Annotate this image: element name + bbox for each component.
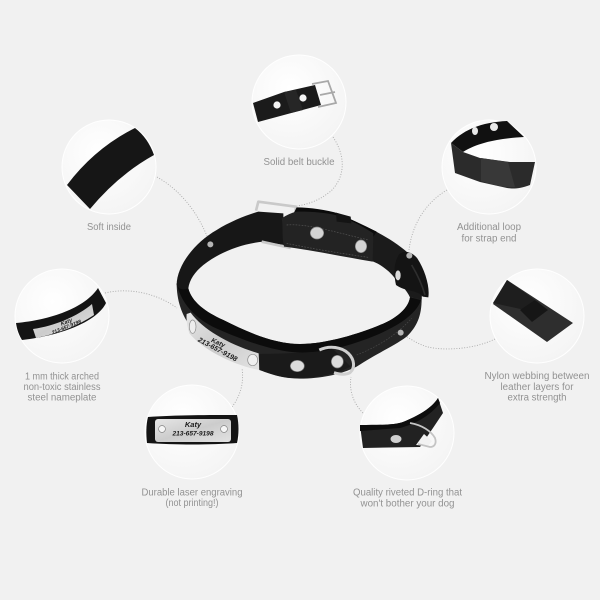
stitching — [357, 318, 412, 355]
top rim beside buckle — [293, 207, 377, 237]
caption: Soft inside — [87, 222, 131, 233]
leather lining swatch — [67, 128, 154, 209]
strap — [146, 415, 238, 444]
plate rivets — [159, 426, 227, 432]
nameplate — [186, 313, 259, 370]
D-ring leather tab — [259, 349, 351, 378]
D-ring — [410, 423, 436, 447]
engraved phone: 213-657-9198 — [196, 336, 238, 363]
buckle frame — [256, 202, 296, 248]
front strap inner rim — [177, 283, 421, 353]
top flap — [493, 280, 535, 310]
plate name: Katy — [60, 317, 74, 328]
D-ring rivets — [290, 355, 343, 372]
detail circle — [62, 120, 156, 214]
plate phone: 213-657-9198 — [50, 319, 82, 337]
strap stitches — [287, 225, 368, 257]
strap rivets — [310, 227, 367, 253]
engraved name: Katy — [185, 420, 202, 429]
connector: nameplate — [105, 291, 177, 308]
detail circle — [252, 55, 346, 149]
panel: additional loop — [442, 120, 536, 244]
connector: strap loop — [409, 190, 447, 250]
keeper loop — [481, 158, 515, 187]
caption line 2: won't bother your dog — [360, 498, 454, 510]
steel plate — [155, 419, 231, 442]
strap loop at end — [394, 252, 429, 297]
connector: laser engraving — [232, 368, 243, 407]
panel: nameplate — [15, 269, 109, 404]
strap — [253, 85, 321, 122]
outer strap — [451, 143, 535, 189]
connector: belt buckle — [297, 137, 342, 206]
strap — [16, 288, 106, 340]
marker dots — [207, 241, 412, 336]
loop rivet — [395, 270, 401, 280]
engraved phone: 213-657-9198 — [171, 430, 214, 438]
steel plate — [33, 304, 94, 338]
caption: Nylon webbing between — [484, 371, 590, 382]
inner strap — [451, 121, 524, 152]
strap holes — [472, 123, 498, 135]
detail circle — [360, 386, 454, 480]
caption line 2: non-toxic stainless — [24, 382, 100, 393]
caption line 3: extra strength — [508, 392, 566, 404]
panel: laser engraving — [142, 385, 242, 509]
loop highlight — [412, 265, 425, 295]
detail circle — [490, 269, 584, 363]
rivet — [390, 435, 402, 443]
caption: Durable laser engraving — [142, 488, 242, 498]
panel: solid belt buckle — [252, 55, 346, 168]
caption: 1 mm thick arched — [25, 372, 99, 382]
connector: soft inside — [157, 177, 209, 241]
right side strap — [337, 213, 422, 299]
strap edge — [360, 398, 440, 431]
connector: nylon webbing — [404, 335, 495, 349]
strap — [360, 398, 443, 448]
D-ring — [319, 347, 354, 374]
caption: Additional loop — [457, 222, 521, 233]
connector: D-ring — [350, 377, 363, 413]
keeper — [284, 90, 303, 113]
leather layer — [493, 280, 573, 342]
ring opening — [416, 434, 432, 446]
back strap with soft lining — [177, 212, 284, 289]
holes — [273, 94, 307, 109]
front strap — [177, 283, 422, 379]
caption line 2: leather layers for — [500, 382, 574, 393]
caption line 2: (not printing!) — [166, 498, 218, 509]
detail circle — [442, 120, 536, 214]
panel: nylon webbing — [484, 269, 590, 404]
buckle frame — [312, 81, 336, 107]
panel: D-ring — [353, 386, 462, 510]
detail circle — [145, 385, 239, 479]
strap keeper — [336, 213, 351, 223]
main collar — [177, 202, 429, 379]
nylon webbing — [520, 300, 548, 322]
caption: Solid belt buckle — [264, 157, 335, 168]
caption line 3: steel nameplate — [28, 392, 97, 404]
caption: Quality riveted D-ring that — [353, 488, 462, 498]
caption line 2: for strap end — [462, 234, 516, 244]
buckle strap end — [282, 212, 373, 262]
nameplate rivets — [189, 320, 258, 366]
panel: soft inside — [62, 120, 156, 233]
engraved name: Katy — [210, 337, 226, 350]
detail circle — [15, 269, 109, 363]
